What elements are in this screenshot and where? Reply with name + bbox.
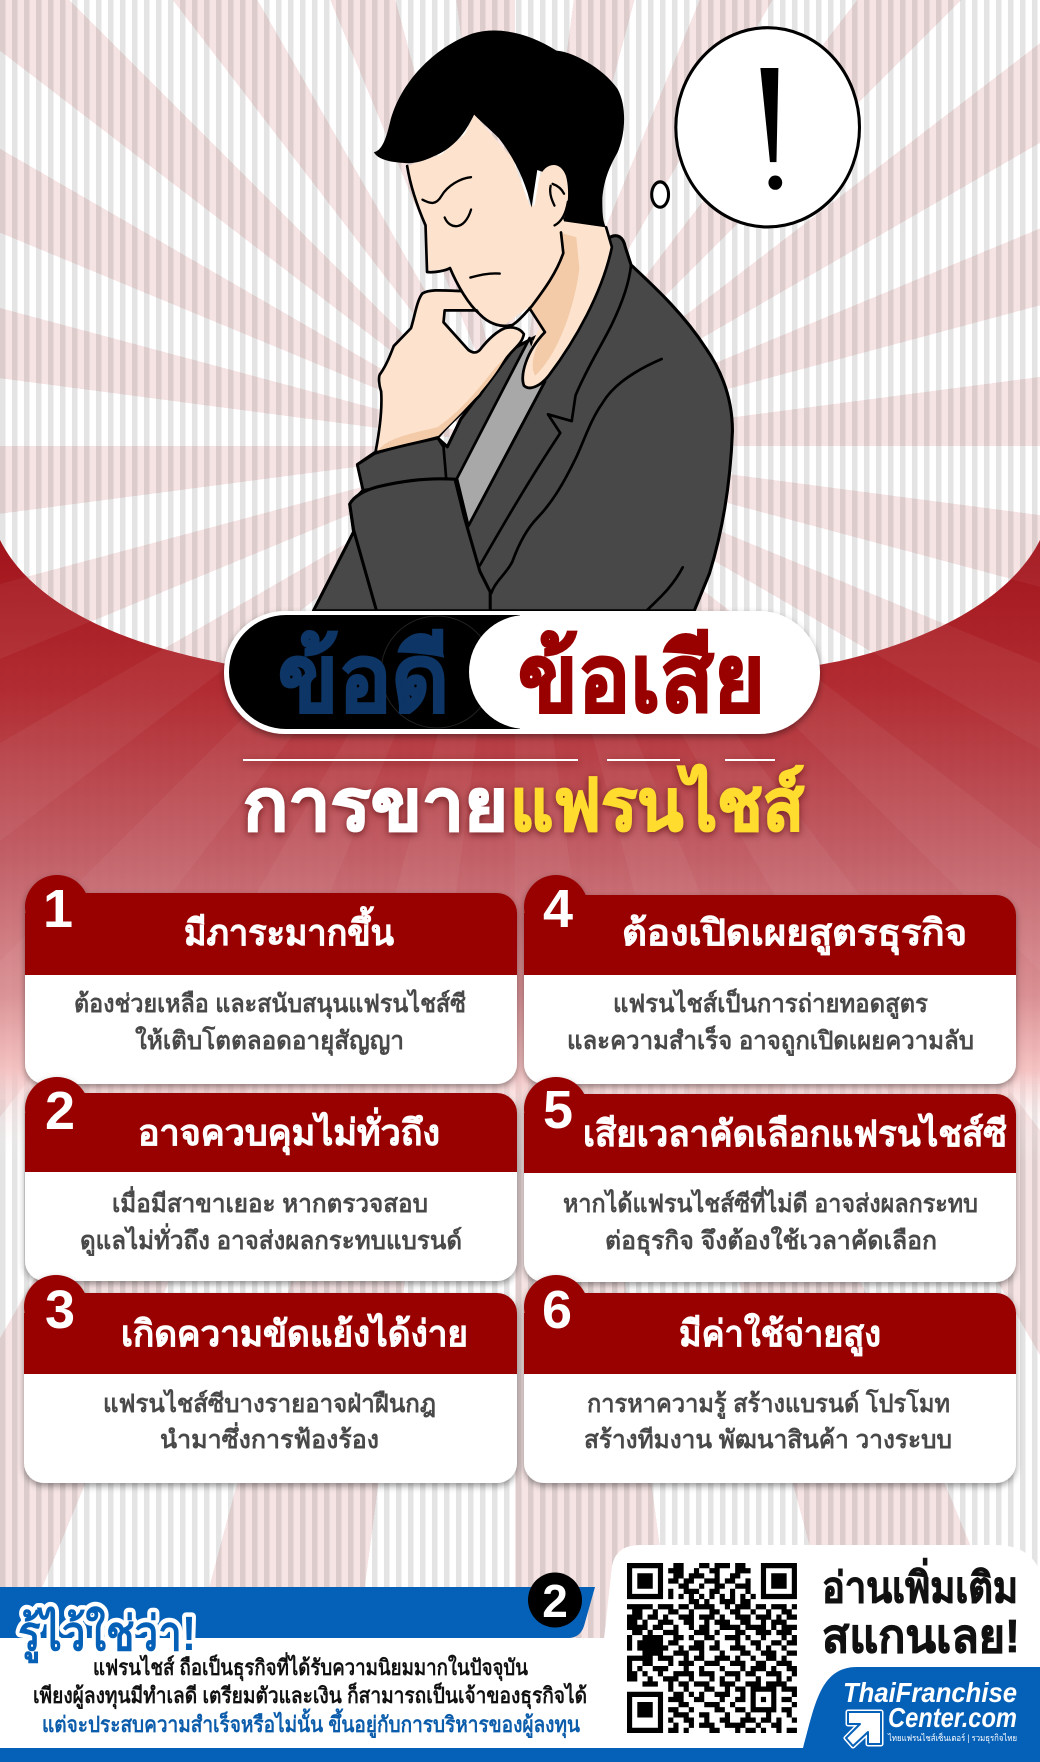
jacket lapel lines	[468, 265, 683, 611]
footer: did you know panel	[0, 1572, 1040, 1762]
card title: ต้องเปิดเผยสูตรธุรกิจ	[622, 912, 967, 956]
card text line 2: ต่อธุรกิจ จึงต้องใช้เวลาคัดเลือก	[605, 1225, 937, 1257]
card title: เกิดความขัดแย้งได้ง่าย	[121, 1312, 468, 1354]
รู้ไว้ใช่ว่า!: รู้ไว้ใช่ว่า!	[18, 1605, 196, 1664]
number: 1	[43, 879, 73, 939]
card text line 1: เมื่อมีสาขาเยอะ หากตรวจสอบ	[112, 1186, 428, 1218]
card 6	[524, 1275, 1016, 1483]
card title: เสียเวลาคัดเลือกแฟรนไชส์ซี	[583, 1112, 1007, 1154]
card body	[25, 1172, 517, 1281]
footer text line 1: แฟรนไชส์ ถือเป็นธุรกิจที่ได้รับความนิยมมากในปัจจุบัน	[93, 1651, 528, 1682]
card text line 2: ให้เติบโตตลอดอายุสัญญา	[135, 1025, 404, 1057]
card 4	[524, 875, 1016, 1084]
card title: มีค่าใช้จ่ายสูง	[679, 1312, 881, 1357]
ข้อเสีย: ข้อเสีย	[518, 626, 765, 731]
number: 5	[543, 1080, 573, 1140]
sleeve cuff	[357, 438, 446, 490]
card text line 1: แฟรนไชส์เป็นการถ่ายทอดสูตร	[613, 988, 929, 1020]
ear	[534, 165, 568, 225]
card text line 2: และความสำเร็จ อาจถูกเปิดเผยความลับ	[567, 1025, 974, 1057]
head and neck skin	[407, 115, 612, 388]
card header	[25, 893, 517, 975]
number badge	[24, 1275, 88, 1339]
card header	[524, 1094, 1016, 1173]
card text line 1: การหาความรู้ สร้างแบรนด์ โปรโมท	[587, 1388, 950, 1420]
number: 4	[543, 879, 573, 939]
light rays over red panel	[0, 541, 1040, 806]
hand shadow	[378, 358, 505, 451]
footer text line 3: แต่จะประสบความสำเร็จหรือไม่นั้น ขึ้นอยู่กับการบริหารของผู้ลงทุน	[42, 1708, 580, 1739]
สแกนเลย!: สแกนเลย!	[822, 1610, 1020, 1662]
card 5	[524, 1077, 1016, 1282]
อ่านเพิ่มเติม: อ่านเพิ่มเติม	[822, 1558, 1018, 1611]
neck shadow	[530, 233, 579, 376]
pill outer	[224, 611, 820, 734]
card text line 1: แฟรนไชส์ซีบางรายอาจฝ่าฝืนกฎ	[103, 1388, 436, 1418]
ข้อดี: ข้อดี	[278, 626, 449, 731]
card body	[524, 1173, 1016, 1282]
card body	[524, 975, 1016, 1084]
card 2	[25, 1077, 517, 1281]
QR code	[627, 1566, 797, 1730]
headline over-lines	[243, 759, 775, 761]
bottom blue bar	[0, 1748, 1040, 1762]
white QR panel	[592, 1545, 1040, 1748]
card text line 1: ต้องช่วยเหลือ และสนับสนุนแฟรนไชส์ซี	[74, 988, 466, 1020]
exclamation dot	[768, 176, 782, 190]
number: 3	[45, 1280, 75, 1340]
thought bubble large	[676, 28, 860, 227]
footer: QR and brand panel	[592, 1545, 1040, 1748]
number badge	[524, 1275, 588, 1339]
card title: มีภาระมากขึ้น	[184, 906, 394, 953]
shirt	[457, 338, 545, 526]
pill heading: ข้อดี ข้อเสีย	[224, 611, 820, 734]
brand logo block	[803, 1667, 1040, 1748]
card text line 2: นำมาซึ่งการฟ้องร้อง	[160, 1422, 379, 1454]
icon: brand arrow	[846, 1712, 881, 1746]
การขาย: การขาย	[243, 766, 508, 846]
card header	[524, 895, 1016, 975]
brand tagline: ไทยแฟรนไชส์เซ็นเตอร์ | รวมธุรกิจไทย	[887, 1731, 1017, 1744]
white text panel	[0, 1638, 620, 1748]
card header	[25, 1093, 517, 1172]
card 3	[24, 1275, 517, 1483]
card header	[524, 1293, 1016, 1374]
headline: การขายแฟรนไชส์	[243, 760, 804, 846]
card 1	[25, 875, 517, 1084]
card text line 1: หากได้แฟรนไชส์ซีที่ไม่ดี อาจส่งผลกระทบ	[563, 1186, 978, 1218]
footer text line 2: เพียงผู้ลงทุนมีทำเลดี เตรียมตัวและเงิน ก็สามารถเป็นเจ้าของธุรกิจได้	[33, 1681, 587, 1710]
hair	[374, 31, 624, 227]
Center.com wordmark: Center.com	[888, 1702, 1017, 1733]
number badge	[524, 875, 588, 939]
thought bubble small	[652, 182, 669, 207]
number: 2	[45, 1081, 75, 1141]
faint circle	[381, 616, 493, 728]
card text line 2: ดูแลไม่ทั่วถึง อาจส่งผลกระทบแบรนด์	[80, 1223, 462, 1257]
card text line 2: สร้างทีมงาน พัฒนาสินค้า วางระบบ	[584, 1426, 952, 1454]
face outlines	[407, 166, 612, 388]
number: 6	[542, 1280, 572, 1340]
card header	[24, 1293, 517, 1374]
hand on chin	[375, 290, 524, 453]
card body	[524, 1374, 1016, 1483]
circled number 2	[528, 1572, 582, 1628]
red curved background panel	[0, 540, 1040, 1762]
pill white side	[469, 615, 817, 729]
number badge	[25, 875, 89, 939]
exclamation mark	[760, 68, 778, 162]
card body	[25, 975, 517, 1084]
pill black side	[229, 615, 520, 729]
number badge	[25, 1077, 89, 1141]
แฟรนไชส์: แฟรนไชส์	[510, 763, 804, 846]
card body	[24, 1374, 517, 1483]
number badge	[524, 1077, 588, 1141]
blue ribbon	[0, 1587, 595, 1638]
jacket	[313, 236, 732, 611]
card title: อาจควบคุมไม่ทั่วถึง	[138, 1107, 440, 1156]
illustration: thinking businessman with thought bubble	[313, 28, 860, 611]
sleeve	[350, 479, 490, 611]
numeral 2: 2	[542, 1575, 568, 1627]
ThaiFranchise wordmark: ThaiFranchise	[843, 1677, 1017, 1708]
